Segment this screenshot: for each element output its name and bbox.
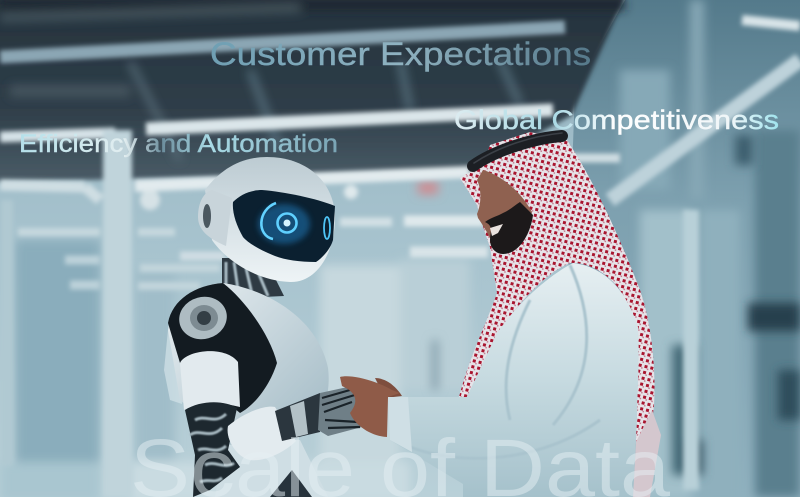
robot lower torso [215,440,328,497]
robot shoulder joint [174,292,232,344]
label: Global Competitiveness: Global Competitiveness [454,105,779,135]
robot neck [222,258,284,298]
agal head cord [473,136,562,166]
robot torso shell [168,283,329,445]
robot mechanical forearm [185,402,240,497]
robot helmet [205,157,335,282]
robot visor [233,190,335,262]
man [340,132,661,497]
lower sash [633,410,661,497]
robot wrist chrome [290,401,308,437]
label: Customer Expectations: Customer Expectations [210,36,591,72]
agal highlight [474,133,562,163]
robot forearm [228,407,296,460]
robe fold lines [395,265,600,458]
smile [490,224,503,236]
second hand [375,378,402,398]
robot [164,157,366,497]
robot base cone [270,470,312,497]
robot wrist [275,393,320,441]
robe [388,263,639,497]
cuff [388,397,412,452]
beard [485,202,533,254]
hand [340,376,400,437]
chrome highlights [190,414,234,482]
label: Efficiency and Automation: Efficiency and Automation [19,130,338,158]
visor glow [258,204,310,244]
robot fingers [318,383,366,436]
robot side panel [164,330,182,404]
robot eye [261,203,330,239]
keffiyeh back and shoulder drape [459,132,654,445]
face skin [477,170,532,254]
robot ear [198,190,232,246]
robot upper arm [180,351,240,410]
finger lines [322,386,364,428]
robot chest mechanics [168,283,277,413]
